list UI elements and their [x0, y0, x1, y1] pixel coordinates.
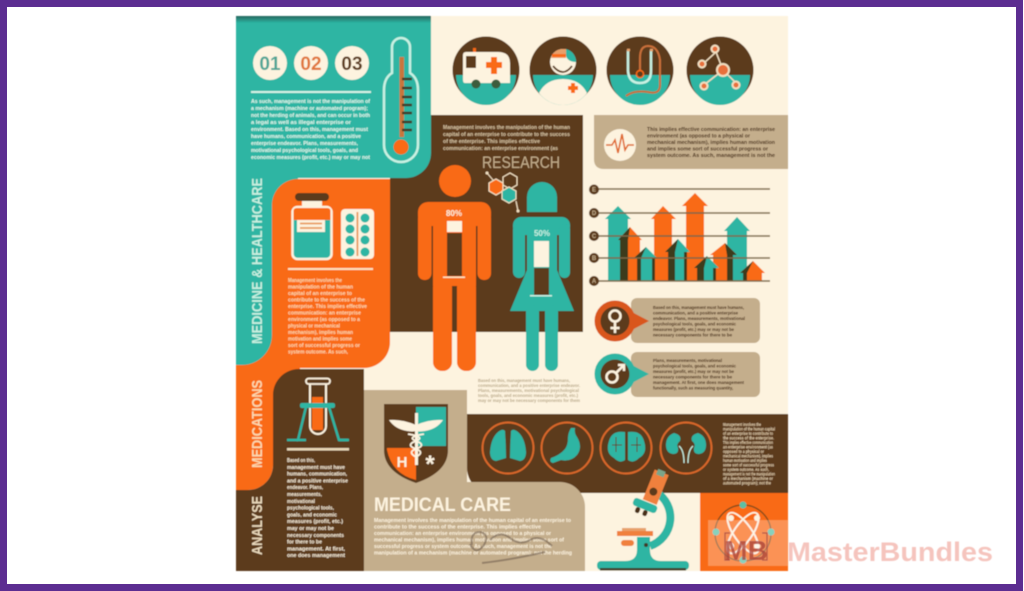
- male text: Plans, measurements, motivational: [653, 358, 722, 364]
- organs text: opposed to a physical or: [723, 449, 764, 454]
- organs text: or system outcome. As such,: [723, 467, 769, 472]
- analyse text: endeavor. Plans,: [287, 485, 323, 491]
- female text: psychological tools, goals, and economic: [653, 322, 736, 328]
- icon: atom: [712, 502, 774, 564]
- medicine text: Management involves the: [288, 278, 342, 284]
- panel: medical care: [364, 390, 585, 571]
- analyse text: one does management: [287, 553, 345, 559]
- microscope: [597, 465, 689, 570]
- panel: research text: [443, 125, 571, 152]
- organs text: This implies effective communication: [723, 440, 773, 445]
- stock watermark: [470, 532, 552, 563]
- watermark: MasterBundles: MB: [724, 535, 768, 566]
- organs text: [723, 422, 775, 486]
- analyse text: goals, and economic: [287, 512, 337, 518]
- panel: caption under figures: tools, goals, and economic measures (profit, etc.): [478, 393, 579, 398]
- figure: man 80%: [418, 165, 491, 371]
- vitals text: system outcome. As such, management is not the: [647, 153, 775, 159]
- medical care text: contribute to the success of the enterprise. This implies effective: [374, 524, 541, 530]
- analyse text: for there to be: [287, 540, 322, 546]
- female text: endeavor. Plans, measurements, motivational: [653, 316, 745, 322]
- axis labels: D: [592, 211, 597, 217]
- icon: stethoscope: [606, 36, 674, 105]
- medicine text: environment (as opposed to a: [288, 317, 361, 323]
- medical care text: communication: an enterprise environment (as opposed to a physical or: [374, 531, 551, 537]
- intro text: As such, management is not the manipulation of: [251, 99, 370, 105]
- medical care text: successful progress or system outcome. As such, management is not the: [374, 544, 552, 550]
- intro text: [251, 99, 371, 161]
- icon: nurse: [530, 36, 596, 105]
- panel: brown analyse: [236, 369, 364, 571]
- icon: lungs: [482, 422, 534, 474]
- male text: functionally, such as measuring quantity,: [653, 386, 734, 392]
- medical care text: mechanical mechanism), implies human motivation and implies some sort of: [374, 538, 564, 544]
- female text: [653, 305, 745, 338]
- heading: medications: MEDICATIONS: [250, 380, 266, 468]
- intro text: not the herding of animals, and can occur in both: [251, 113, 371, 119]
- medicine text: communication: an enterprise: [288, 310, 361, 316]
- analyse text: humans, communication,: [287, 472, 347, 478]
- axis labels: E: [592, 188, 596, 194]
- figure: man 80%: 80%: [446, 209, 462, 218]
- organs text: of an enterprise to contribute to: [723, 431, 773, 436]
- panel: research text: of the enterprise. This implies effective: [443, 139, 540, 145]
- male text: [653, 358, 744, 392]
- medicine text: system outcome. As such,: [288, 350, 348, 356]
- organs text: some sort of successful progress: [723, 462, 775, 468]
- medicine text: [288, 278, 367, 356]
- number badges: 01: [259, 54, 281, 75]
- panel: orange medicine: [236, 179, 390, 490]
- female text: necessary components for there to be: [653, 332, 732, 338]
- analyse text: and a positive enterprise: [287, 478, 348, 484]
- analyse text: may or may not be: [287, 526, 334, 532]
- analyse text: motivational: [287, 499, 315, 505]
- figure: woman 50%: [510, 182, 574, 371]
- organs text: management is not the manipulation: [723, 472, 775, 476]
- panel: vitals box: [594, 115, 788, 169]
- icon: ambulance: [452, 36, 520, 105]
- analyse text: [287, 458, 348, 559]
- intro text: economic measures (profit, etc.) may or may not: [251, 155, 370, 161]
- vitals text: This implies effective communication: an enterprise: [647, 127, 775, 133]
- analyse text: measures (profit, etc.): [287, 519, 343, 525]
- icon: kidneys: [660, 422, 712, 474]
- intro text: a legal as well as illegal enterprise or: [251, 120, 352, 126]
- medicine text: contribute to the success of the: [288, 298, 365, 304]
- vitals text: and implies some sort of successful progress or: [647, 146, 769, 152]
- medicine text: physical or mechanical: [288, 324, 340, 330]
- analyse text: psychological tools,: [287, 506, 334, 512]
- intro text: have humans, communication, and a positive: [251, 134, 361, 140]
- axis labels: A: [592, 279, 597, 285]
- medicine text: enterprise. This implies effective: [288, 304, 367, 310]
- organs text: an enterprise environment (as: [723, 444, 774, 450]
- analyse text: measurements,: [287, 492, 322, 498]
- heading: medical care: MEDICAL CARE: [374, 495, 511, 516]
- medicine text: mechanism), implies human: [288, 330, 353, 336]
- analyse text: necessary components: [287, 533, 344, 539]
- panel: caption under figures: communication, and a positive enterprise endeavor.: [478, 383, 580, 388]
- vitals text: environment (as opposed to a physical or: [647, 134, 751, 140]
- panel: caption under figures: Based on this, management must have humans,: [478, 378, 570, 383]
- panel: caption under figures: Plans, measurements, motivational psychological: [478, 388, 579, 393]
- organs text: of a mechanism (machine or: [723, 476, 773, 481]
- icon: female symbol: [610, 310, 620, 333]
- analyse text: management. At first,: [287, 546, 345, 552]
- panel: research background: [390, 115, 583, 332]
- male text: psychological tools, goals, and economic: [653, 364, 736, 370]
- panel: research text: capital of an enterprise to contribute to the success: [443, 132, 570, 138]
- vitals text: [647, 127, 776, 159]
- poster: [236, 16, 788, 571]
- number badges: 02: [300, 54, 322, 75]
- number badges: [253, 46, 369, 80]
- intro text: environment. Based on this, management must: [251, 127, 368, 133]
- icon: stomach: [542, 422, 592, 474]
- orange and teal arrows: [605, 193, 765, 281]
- axis labels: C: [592, 234, 597, 240]
- icon: medicine jar: [292, 193, 332, 259]
- medical care text: manipulation of a mechanism (machine or automated program); not the herding: [374, 550, 572, 556]
- panel: caption under figures: may or may not be necessary components for them: [478, 398, 580, 403]
- female text: communication, and a positive enterprise: [653, 310, 738, 316]
- female text: Based on this, management must have humans,: [653, 305, 745, 311]
- icon: caduceus shield: H: [397, 454, 407, 471]
- vitals text: mechanical mechanism), implies human motivation: [647, 140, 776, 146]
- callout: female: [594, 298, 760, 343]
- organs text: Management involves the: [723, 422, 761, 427]
- organs text: the success of the enterprise.: [723, 436, 774, 440]
- icon: molecule: [686, 36, 754, 105]
- intro text: a mechanism (machine or automated program);: [251, 106, 368, 112]
- male text: management. At first, one does management: [653, 380, 744, 386]
- panel: caption under figures: [478, 378, 580, 403]
- male text: necessary components for there to be: [653, 374, 732, 380]
- panel: teal intro: [236, 16, 431, 365]
- female text: measures (profit, etc.) may or may not be: [653, 327, 734, 333]
- icon row: [452, 36, 754, 105]
- medicine text: capital of an enterprise to: [288, 291, 353, 297]
- heading: research: RESEARCH: [482, 154, 560, 172]
- medicine text: sort of successful progress or: [288, 343, 361, 349]
- panel: orange atom square: [700, 493, 788, 571]
- icon: hexagon molecule: [486, 172, 520, 212]
- organs text: mechanical mechanism), implies: [723, 454, 774, 458]
- chart: arrows bar chart: [589, 184, 770, 286]
- intro text: motivational psychological tools, goals, and: [251, 148, 359, 154]
- medicine text: manipulation of the human: [288, 284, 354, 290]
- icon: brain: [600, 422, 652, 474]
- medical care text: [374, 518, 572, 556]
- icon: male symbol: [606, 365, 624, 382]
- icon: thermometer: [384, 38, 418, 162]
- organs text: manipulation of the human capital: [723, 426, 775, 432]
- heading: medicine and healthcare: MEDICINE & HEALTHCARE: [250, 178, 266, 344]
- heading: analyse: ANALYSE: [250, 496, 266, 555]
- intro text: enterprise endeavor. Plans, measurements,: [251, 141, 358, 147]
- watermark: MasterBundles: [708, 520, 993, 567]
- watermark: MasterBundles: MasterBundles: [787, 537, 993, 567]
- icon: test tube on stand: [287, 378, 349, 440]
- figure: woman 50%: 50%: [534, 229, 550, 238]
- axis labels: B: [592, 256, 597, 262]
- icon: caduceus shield: [384, 404, 448, 483]
- poster background: [236, 16, 788, 571]
- organs text: automated program); not the: [723, 480, 772, 486]
- organs text: human motivation and implies: [723, 458, 767, 463]
- medical care text: Management involves the manipulation of the human capital of an enterprise to: [374, 518, 571, 524]
- axis labels: [589, 184, 599, 286]
- icon: caduceus shield: *: [425, 451, 435, 478]
- medicine text: motivation and implies some: [288, 336, 352, 342]
- analyse text: Based on this,: [287, 458, 315, 464]
- analyse text: management must have: [287, 465, 345, 471]
- icon: pill blister: [341, 209, 374, 259]
- panel: research text: communication: an enterprise environment (as: [443, 146, 558, 152]
- number badges: 03: [341, 54, 363, 75]
- male text: measures (profit, etc.) may or may not be: [653, 369, 734, 375]
- panel: research text: Management involves the manipulation of the human: [443, 125, 571, 131]
- callout: male: [594, 352, 760, 397]
- panel: organs band: [467, 414, 788, 493]
